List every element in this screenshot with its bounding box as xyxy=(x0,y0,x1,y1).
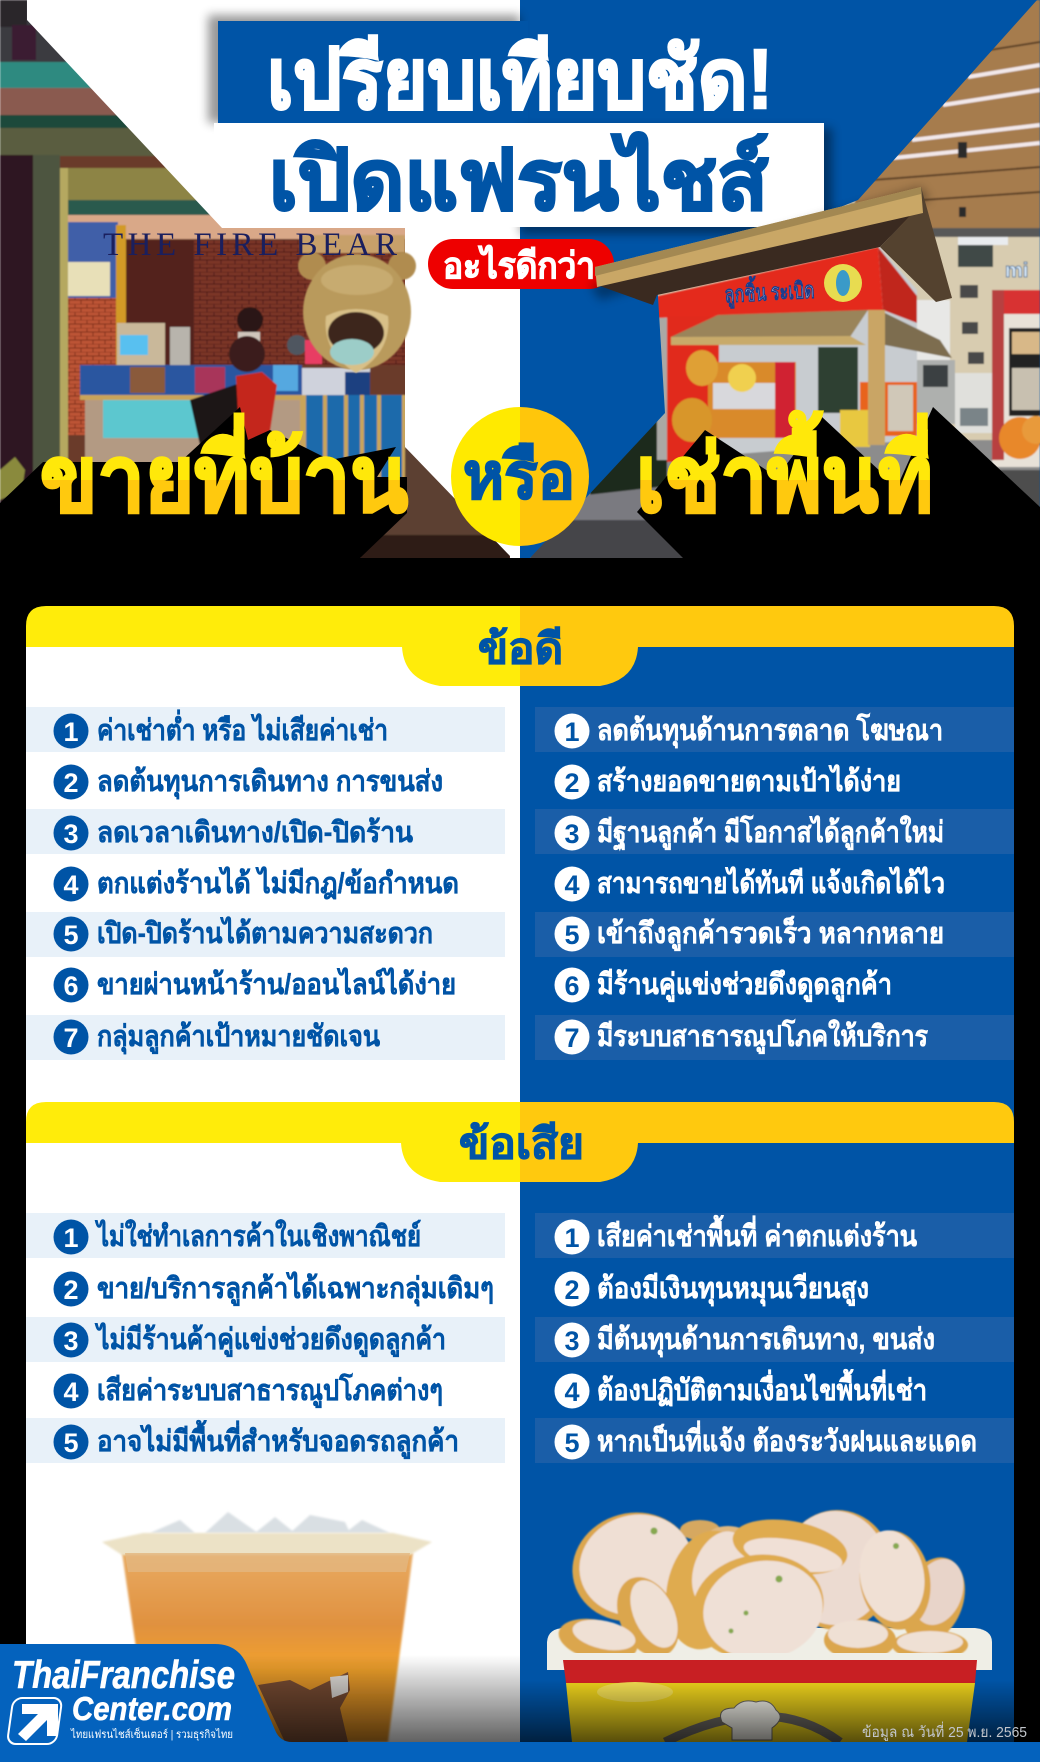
title box: blue: เปรียบเทียบชัด! xyxy=(267,32,773,126)
heading: advantages: ข้อดี xyxy=(478,625,563,672)
list: advantages of renting a space: มีร้านคู่แข่งช่วยดึงดูดลูกค้า xyxy=(597,969,892,1002)
list: disadvantages of renting a space: 5 xyxy=(564,1428,580,1458)
heading: disadvantages xyxy=(26,1102,1014,1182)
or badge xyxy=(451,407,589,546)
list: advantages of selling at home: ลดเวลาเดินทาง/เปิด-ปิดร้าน xyxy=(97,817,413,849)
logo: ThaiFranchise Center.com: ไทยแฟรนไชส์เซ็นเตอร์ | รวมธุรกิจไทย xyxy=(70,1727,233,1741)
title box: white: เปิดแฟรนไชส์ xyxy=(269,132,769,227)
photo: fish ball bucket xyxy=(547,1499,992,1742)
list: disadvantages of renting a space: 3 xyxy=(564,1326,580,1356)
list: disadvantages of selling at home: ขาย/บริการลูกค้าได้เฉพาะกลุ่มเดิมๆ xyxy=(97,1271,494,1306)
list: advantages of selling at home: 2 xyxy=(63,768,79,798)
kiosk sign xyxy=(724,264,862,309)
title box: white xyxy=(214,123,832,234)
list: advantages of selling at home: 1 xyxy=(63,717,79,747)
list: disadvantages of selling at home: 4 xyxy=(63,1377,79,1407)
headline left: sell at home: ขายที่บ้าน xyxy=(40,413,408,531)
logo: ThaiFranchise Center.com xyxy=(0,1644,292,1744)
list: disadvantages of renting a space: ต้องปฏิบัติตามเงื่อนไขพื้นที่เช่า xyxy=(597,1368,927,1407)
black wedges behind headline xyxy=(0,407,1040,558)
list: disadvantages of renting a space xyxy=(535,1213,1014,1463)
list: advantages of selling at home: เปิด-ปิดร้านได้ตามความสะดวก xyxy=(97,916,433,950)
icon: logo arrow xyxy=(7,1698,62,1744)
list: disadvantages of selling at home: ไม่มีร้านค้าคู่แข่งช่วยดึงดูดลูกค้า xyxy=(94,1322,446,1357)
callout: red pill: อะไรดีกว่า xyxy=(443,244,595,286)
list: disadvantages of selling at home: ไม่ใช่ทำเลการค้าในเชิงพาณิชย์ xyxy=(95,1219,421,1253)
list: advantages of selling at home: 5 xyxy=(63,920,79,950)
photo: home shop The Fire Bear xyxy=(0,0,520,560)
list: advantages of selling at home xyxy=(26,707,505,1060)
list: advantages of renting a space: มีฐานลูกค้า มีโอกาสได้ลูกค้าใหม่ xyxy=(597,814,944,851)
list: advantages of renting a space: มีระบบสาธารณูปโภคให้บริการ xyxy=(597,1018,928,1054)
photo: rented kiosk: mi xyxy=(1005,260,1028,282)
list: disadvantages of renting a space: หากเป็นที่แจ้ง ต้องระวังฝนและแดด xyxy=(597,1420,977,1458)
shop sign text: THE FIRE BEAR xyxy=(103,227,397,263)
list: disadvantages of selling at home: 2 xyxy=(63,1275,79,1305)
list: disadvantages of renting a space: มีต้นทุนด้านการเดินทาง, ขนส่ง xyxy=(597,1324,935,1357)
panel: advantages and disadvantages background xyxy=(26,640,1014,1742)
list: advantages of renting a space: ลดต้นทุนด้านการตลาด โฆษณา xyxy=(597,712,943,748)
list: advantages of renting a space: สามารถขายได้ทันที แจ้งเกิดได้ไว xyxy=(597,866,945,900)
list: disadvantages of renting a space: 2 xyxy=(564,1275,580,1305)
list: advantages of renting a space: 7 xyxy=(564,1023,580,1053)
heading: advantages xyxy=(26,606,1014,686)
list: advantages of renting a space: 6 xyxy=(564,971,580,1001)
list: advantages of renting a space: เข้าถึงลูกค้ารวดเร็ว หลากหลาย xyxy=(597,915,944,951)
list: advantages of selling at home: 7 xyxy=(63,1023,79,1053)
kiosk sign: ลูกชิ้น ระเบิด xyxy=(724,273,815,309)
list: advantages of renting a space: 3 xyxy=(564,819,580,849)
list: disadvantages of selling at home xyxy=(26,1213,505,1463)
list: advantages of selling at home: 6 xyxy=(63,971,79,1001)
list: disadvantages of renting a space: เสียค่าเช่าพื้นที่ ค่าตกแต่งร้าน xyxy=(597,1214,917,1253)
list: disadvantages of selling at home: อาจไม่มีพื้นที่สำหรับจอดรถลูกค้า xyxy=(97,1419,459,1459)
list: advantages of selling at home: ขายผ่านหน้าร้าน/ออนไลน์ได้ง่าย xyxy=(97,967,456,1001)
or badge: หรือ xyxy=(463,440,575,512)
heading: disadvantages: ข้อเสีย xyxy=(459,1120,584,1167)
list: advantages of renting a space xyxy=(535,707,1014,1060)
hero background: white and blue halves xyxy=(0,0,1040,558)
photo: rented kiosk xyxy=(520,0,1040,560)
list: advantages of renting a space: 4 xyxy=(564,870,580,900)
list: disadvantages of selling at home: เสียค่าระบบสาธารณูปโภคต่างๆ xyxy=(97,1372,443,1408)
list: advantages of selling at home: ลดต้นทุนการเดินทาง การขนส่ง xyxy=(97,766,443,799)
footer strip xyxy=(0,1742,1040,1762)
date note: ข้อมูล ณ วันที่ 25 พ.ย. 2565 xyxy=(862,1721,1027,1741)
list: advantages of renting a space: 5 xyxy=(564,920,580,950)
logo: ThaiFranchise Center.com: ThaiFranchise xyxy=(12,1654,235,1697)
list: advantages of renting a space: 2 xyxy=(564,768,580,798)
list: disadvantages of selling at home: 5 xyxy=(63,1428,79,1458)
bottom fade over photos xyxy=(26,1655,1014,1742)
list: advantages of selling at home: 4 xyxy=(63,870,79,900)
list: disadvantages of selling at home: 3 xyxy=(63,1326,79,1356)
list: disadvantages of renting a space: ต้องมีเงินทุนหมุนเวียนสูง xyxy=(597,1273,869,1306)
headline right: rent a space: เช่าพื้นที่ xyxy=(636,411,933,531)
list: advantages of selling at home: ตกแต่งร้านได้ ไม่มีกฎ/ข้อกำหนด xyxy=(97,866,459,900)
kiosk roof xyxy=(590,187,952,305)
list: disadvantages of renting a space: 1 xyxy=(564,1223,580,1253)
list: disadvantages of selling at home: 1 xyxy=(63,1223,79,1253)
list: advantages of selling at home: กลุ่มลูกค้าเป้าหมายชัดเจน xyxy=(97,1021,380,1054)
list: advantages of renting a space: สร้างยอดขายตามเป้าได้ง่าย xyxy=(597,764,901,798)
list: advantages of renting a space: 1 xyxy=(564,717,580,747)
photo: iced tea cup xyxy=(102,1512,432,1742)
list: advantages of selling at home: ค่าเช่าต่ำ หรือ ไม่เสียค่าเช่า xyxy=(97,709,388,747)
list: advantages of selling at home: 3 xyxy=(63,819,79,849)
list: disadvantages of renting a space: 4 xyxy=(564,1377,580,1407)
bear head sculpture xyxy=(298,252,416,373)
logo: ThaiFranchise Center.com: Center.com xyxy=(72,1690,232,1727)
